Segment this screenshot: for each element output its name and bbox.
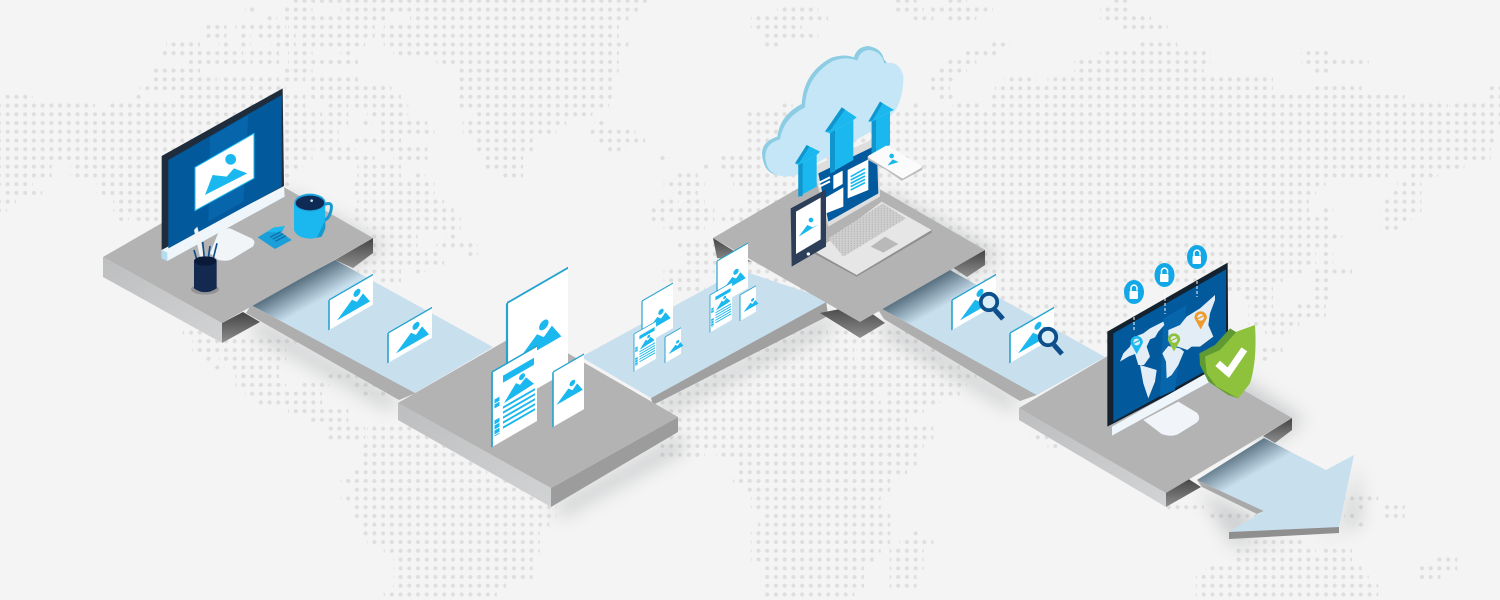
band 1: flow from desk to documents [246, 260, 493, 400]
green security shield [1199, 325, 1256, 398]
laptop screen panels [833, 171, 843, 189]
pin blue [1131, 336, 1143, 354]
laptop [815, 137, 932, 277]
picture on screen [195, 133, 254, 211]
padlock badges [1124, 245, 1207, 332]
output arrow [1197, 438, 1354, 539]
soft shadows [250, 190, 1360, 548]
upload arrow 3 [868, 102, 894, 154]
small documents group 2 [710, 243, 758, 332]
platform 2 [398, 329, 678, 507]
upload arrow 1 [795, 145, 820, 197]
upload arrow 2 [825, 107, 857, 173]
image card 2 [388, 308, 432, 363]
tall image [507, 268, 568, 406]
platform 3 [713, 165, 985, 338]
world map monitor [1107, 263, 1228, 436]
screen frame [1107, 263, 1228, 427]
desktop monitor with image [162, 88, 285, 261]
band 2: flow from documents to laptop [581, 270, 830, 405]
pin green [1168, 333, 1180, 351]
world map [1120, 295, 1215, 398]
lock 2 [1154, 263, 1174, 287]
pen holder [191, 227, 219, 295]
coffee mug [294, 194, 331, 239]
stand [1143, 402, 1199, 436]
note pad [258, 226, 292, 249]
band 3: flow from laptop to secure monitor [875, 270, 1105, 401]
small documents group 1 [634, 283, 683, 372]
pin orange [1195, 311, 1207, 329]
text document [492, 346, 537, 447]
image card 1 [329, 275, 373, 330]
cloud [762, 46, 903, 176]
platform 4 [1019, 334, 1292, 507]
lock 1 [1124, 280, 1144, 304]
small image card [553, 354, 584, 427]
smartphone [868, 147, 922, 180]
tablet [791, 189, 826, 267]
magnified image card 1 [952, 275, 1003, 330]
monitor stand [210, 228, 254, 261]
platform 1 [103, 170, 373, 343]
lock 3 [1187, 245, 1207, 269]
magnified image card 2 [1010, 308, 1062, 363]
monitor body [162, 88, 284, 250]
large documents group [492, 268, 584, 447]
